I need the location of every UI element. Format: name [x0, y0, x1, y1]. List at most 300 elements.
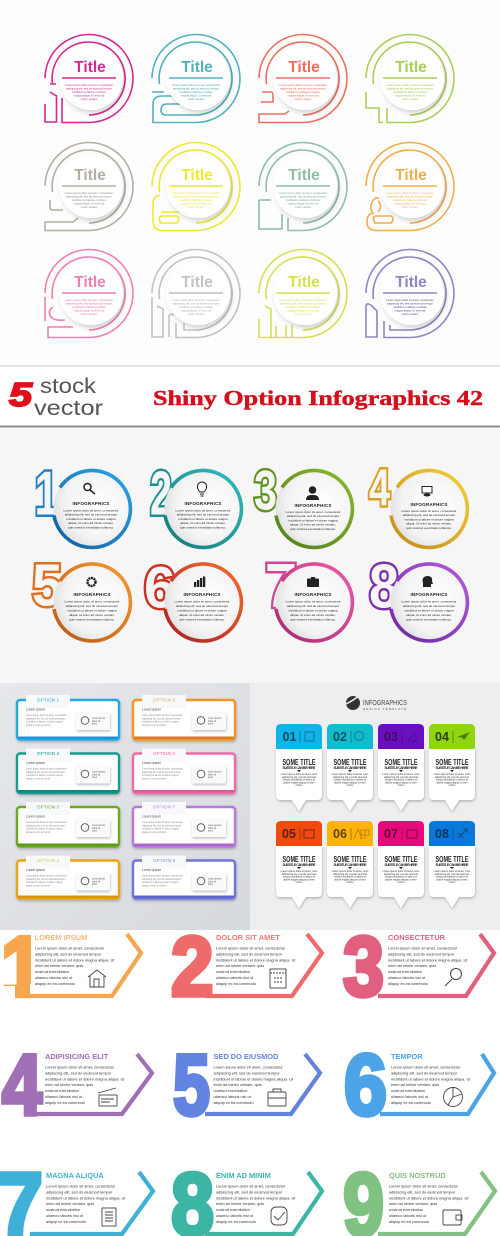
- option 5: incididunt ut labore et dolore magna: [142, 721, 179, 724]
- tile: lime yellow 11: minim veniam: [295, 312, 312, 316]
- tile: sea green 7: incididunt ut labore et dolore: [286, 198, 320, 202]
- step 8: incididunt ut labore et dolore magna aliqua. Ut: [216, 1195, 296, 1200]
- option 8: Lorem ipsum: [208, 878, 221, 880]
- tile: purple 12: Lorem ipsum dolor sit amet, consectetur: [386, 298, 434, 302]
- pin card 07: dolore magna aliqua ut enim: [385, 878, 417, 881]
- step 7: aliquip ex ea commodo: [46, 1219, 86, 1224]
- pin card 07: SUBTITLE CAN BE HERE: [384, 863, 418, 867]
- tile: grey 10: minim veniam: [188, 312, 205, 316]
- pin card 01: minim: [296, 784, 302, 787]
- tile: purple 12: [366, 250, 454, 338]
- pin card 07: 07: [384, 827, 398, 841]
- numbered circle 8: 8: [369, 552, 399, 622]
- numbered circle 6: INFOGRAPHICS: [184, 592, 220, 597]
- pin card 02: SUBTITLE CAN BE HERE: [334, 766, 367, 770]
- step 8: ENIM AD MINIM: [216, 1171, 271, 1180]
- tile: grey 10: Title: [181, 274, 213, 291]
- tile: taupe 5: magna aliqua. Ut enim ad: [74, 202, 105, 206]
- step 7: [0, 1154, 153, 1236]
- numbered circle 1: 1: [34, 460, 58, 528]
- tile: pink 9: Lorem ipsum dolor sit amet, consectetur: [65, 298, 113, 302]
- step 8: [171, 1154, 322, 1236]
- pin card 04: SOME TITLE: [436, 758, 469, 767]
- step 1: 1: [1, 920, 43, 1014]
- pin card 04: 04: [435, 730, 449, 744]
- banner: stock: [40, 375, 97, 398]
- step 4: adipiscing elit, sed do eiusmod tempor: [45, 1070, 112, 1075]
- tile: purple 12: Title: [395, 274, 427, 291]
- pin card 03: 03: [384, 730, 398, 744]
- tile: sea green 7: [259, 142, 347, 230]
- step 5: incididunt ut labore et dolore magna aliqua. Ut: [214, 1076, 294, 1081]
- step 7: enim ad minim veniam, quis: [46, 1201, 94, 1206]
- option 6: adipiscing elit, sed do eiusmod tempor: [142, 771, 181, 774]
- step 3: enim ad minim veniam, quis: [388, 963, 436, 968]
- numbered circle 5: Lorem ipsum dolor sit amet, consectetur: [64, 600, 120, 604]
- option 7: amet: [208, 830, 213, 833]
- pin card 02: tempor incididunt ut labore et: [334, 779, 366, 782]
- option 5: dolor sit: [208, 720, 216, 723]
- numbered circle 8: incididunt ut labore et dolore magna: [404, 608, 454, 612]
- pin card 05: 05: [282, 827, 296, 841]
- tile: lime green 4: adipiscing elit, sed do eiusmod tempor: [387, 86, 433, 90]
- pin card 02: SOME TITLE: [334, 758, 367, 767]
- numbered circle 7: 7: [265, 552, 297, 621]
- step 3: Lorem ipsum dolor sit amet, consectetur: [388, 946, 458, 950]
- step 9: incididunt ut labore et dolore magna aliqua. Ut: [389, 1195, 469, 1200]
- section background: arrow steps: [0, 930, 500, 1236]
- numbered circle 8: adipiscing elit, sed do eiusmod tempor: [403, 604, 455, 608]
- numbered circle 6: 6: [144, 556, 176, 620]
- option 8: OPTION 8: [153, 858, 176, 864]
- step 5: ullamco laboris nisi ut: [214, 1094, 252, 1099]
- numbered circle 5: aliqua. Ut enim ad minim veniam,: [69, 613, 115, 617]
- numbered circle 6: incididunt ut labore et dolore magna: [177, 608, 227, 612]
- step 3: [343, 920, 494, 1014]
- numbered circle 3: adipiscing elit, sed do eiusmod tempor: [287, 514, 339, 518]
- step 5: SED DO EIUSMOD: [214, 1052, 279, 1061]
- step 5: 5: [173, 1038, 210, 1134]
- tile: taupe 5: minim veniam: [81, 205, 98, 209]
- option 3: dolor sit: [92, 827, 100, 830]
- tile: orange 8: Title: [395, 167, 427, 184]
- pin card 05: SOME TITLE: [282, 855, 316, 864]
- step 6: Lorem ipsum dolor sit amet, consectetur: [391, 1064, 461, 1070]
- numbered circle 3: [254, 458, 352, 547]
- numbered circle 6: aliqua. Ut enim ad minim veniam,: [179, 613, 225, 617]
- tile: lime yellow 11: Lorem ipsum dolor sit amet, consectetur: [279, 298, 327, 302]
- step 7: MAGNA ALIQUA: [46, 1171, 104, 1180]
- pin card 08: [429, 821, 475, 908]
- option 4: dolor sit: [92, 880, 100, 883]
- numbered circle 1: Lorem ipsum dolor sit amet, consectetur: [63, 508, 119, 512]
- tile: taupe 5: Title: [74, 167, 106, 184]
- numbered circle 1: adipiscing elit, sed do eiusmod tempor: [65, 513, 117, 517]
- numbered circle 2: [150, 460, 242, 547]
- numbered circle 1: aliqua. Ut enim ad minim veniam,: [68, 521, 114, 525]
- tile: orange 8: adipiscing elit, sed do eiusmod tempor: [387, 194, 433, 198]
- option 2: aliqua ut enim ad minim: [26, 777, 50, 780]
- option 5: [133, 695, 235, 740]
- tile: yellow 6: Title: [181, 167, 213, 184]
- icon: light bulb: [197, 482, 207, 496]
- option 5: Lorem ipsum: [142, 708, 161, 712]
- step 8: Lorem ipsum dolor sit amet, consectetur: [216, 1184, 286, 1188]
- numbered circle 7: aliqua. Ut enim ad minim veniam,: [290, 613, 336, 617]
- icon: wallet: [443, 1210, 462, 1225]
- option 6: amet: [208, 776, 213, 779]
- step 6: TEMPOR: [391, 1052, 423, 1061]
- pin card 06: SUBTITLE CAN BE HERE: [334, 863, 367, 867]
- step 5: aliquip ex ea commodo: [214, 1100, 254, 1105]
- pin card 05: minim: [296, 881, 302, 884]
- option 1: amet: [92, 723, 97, 726]
- tile: orange 8: minim veniam: [402, 205, 419, 209]
- step 3: 3: [343, 920, 384, 1014]
- numbered circle 5: adipiscing elit, sed do eiusmod tempor: [66, 604, 118, 608]
- step 3: aliquip ex ea commodo: [388, 981, 428, 986]
- banner: vector: [34, 397, 103, 420]
- pin card 01: adipiscing elit, sed do eiusmod: [282, 776, 317, 779]
- step 6: incididunt ut labore et dolore magna aliqua. Ut: [391, 1076, 471, 1081]
- step 4: incididunt ut labore et dolore magna aliqua. Ut: [45, 1076, 125, 1081]
- option 7: Lorem ipsum dolor sit amet, consectetur: [142, 821, 183, 824]
- pin card 06: Lorem ipsum dolor sit amet, cons: [332, 870, 369, 873]
- tile: lime green 4: magna aliqua. Ut enim ad: [395, 94, 426, 98]
- numbered circle 7: INFOGRAPHICS: [294, 592, 332, 597]
- pin card 04: dolore magna aliqua ut enim: [436, 781, 468, 784]
- numbered circle 7: incididunt ut labore et dolore magna: [288, 608, 338, 612]
- numbered circle 4: Lorem ipsum dolor sit amet, consectetur: [401, 509, 457, 513]
- pin card 01: SUBTITLE CAN BE HERE: [282, 766, 316, 770]
- step 6: aliquip ex ea commodo: [391, 1100, 431, 1105]
- pin card 07: adipiscing elit, sed do eiusmod: [384, 873, 419, 876]
- step 7: adipiscing elit, sed do eiusmod tempor: [46, 1189, 113, 1194]
- option 4: Lorem ipsum: [26, 868, 45, 872]
- option 7: Lorem ipsum: [142, 814, 161, 818]
- tile: grey 10: adipiscing elit, sed do eiusmod tempor: [173, 302, 219, 306]
- numbered circle 2: INFOGRAPHICS: [184, 501, 222, 506]
- option 7: OPTION 7: [153, 804, 176, 810]
- numbered circle 6: quis nostrud exercitation ullamco.: [179, 618, 225, 622]
- icon: head: [422, 576, 433, 587]
- tile: pink 9: minim veniam: [81, 312, 98, 316]
- option 3: [17, 802, 119, 846]
- pin card 06: adipiscing elit, sed do eiusmod: [333, 873, 368, 876]
- step 2: nostrud exercitation: [216, 969, 250, 974]
- step 9: nostrud exercitation: [389, 1207, 423, 1212]
- tile: magenta 1: Title: [74, 59, 106, 76]
- pin card 01: [276, 724, 322, 811]
- step 6: ullamco laboris nisi ut: [391, 1094, 429, 1099]
- step 9: aliquip ex ea commodo: [389, 1219, 429, 1224]
- option 5: aliqua ut enim ad minim: [142, 724, 166, 727]
- tile: teal 2: incididunt ut labore et dolore: [179, 90, 213, 94]
- option 3: incididunt ut labore et dolore magna: [26, 828, 63, 831]
- tile: purple 12: magna aliqua. Ut enim ad: [395, 308, 426, 312]
- tile: yellow 6: incididunt ut labore et dolore: [179, 198, 213, 202]
- pin card 03: Lorem ipsum dolor sit amet, cons: [383, 773, 420, 776]
- tile: purple 12: incididunt ut labore et dolore: [393, 305, 427, 309]
- tile: taupe 5: incididunt ut labore et dolore: [72, 198, 106, 202]
- tile: pink 9: Title: [74, 274, 106, 291]
- pin card 05: Lorem ipsum dolor sit amet, cons: [281, 870, 318, 873]
- tile: grey 10: Lorem ipsum dolor sit amet, consectetur: [172, 298, 220, 302]
- option 6: Lorem ipsum: [142, 761, 161, 765]
- step 3: ullamco laboris nisi ut: [388, 975, 426, 980]
- tile: lime yellow 11: incididunt ut labore et dolore: [286, 305, 320, 309]
- tile: taupe 5: [45, 142, 133, 230]
- option 7: aliqua ut enim ad minim: [142, 831, 166, 834]
- tile: teal 2: Title: [181, 59, 213, 76]
- option 4: adipiscing elit, sed do eiusmod tempor: [26, 878, 65, 881]
- logo: DESIGN TEMPLATE: [363, 707, 406, 711]
- tile: taupe 5: Lorem ipsum dolor sit amet, consectetur: [65, 191, 113, 195]
- numbered circle 5: [32, 552, 130, 641]
- pin card 05: [276, 821, 322, 908]
- numbered circle 3: incididunt ut labore et dolore magna: [288, 518, 338, 522]
- option 3: aliqua ut enim ad minim: [26, 831, 50, 834]
- option 6: [133, 748, 235, 793]
- tile: teal 2: [152, 35, 240, 123]
- numbered circle 7: quis nostrud exercitation ullamco.: [290, 618, 336, 622]
- banner: 5: [9, 376, 33, 413]
- option 8: aliqua ut enim ad minim: [142, 884, 166, 887]
- numbered circle 8: quis nostrud exercitation ullamco.: [406, 618, 452, 622]
- step 1: nostrud exercitation: [35, 969, 69, 974]
- numbered circle 1: [34, 460, 130, 547]
- option 2: adipiscing elit, sed do eiusmod tempor: [26, 771, 65, 774]
- pin card 03: tempor incididunt ut labore et: [385, 779, 417, 782]
- step 2: aliquip ex ea commodo: [216, 981, 256, 986]
- tile: sea green 7: minim veniam: [295, 205, 312, 209]
- option 7: incididunt ut labore et dolore magna: [142, 828, 179, 831]
- numbered circle 2: quis nostrud exercitation ullamco.: [180, 526, 226, 530]
- pin card 08: dolore magna aliqua ut enim: [436, 878, 468, 881]
- pin card 08: adipiscing elit, sed do eiusmod: [435, 873, 470, 876]
- tile: yellow 6: [152, 142, 240, 230]
- numbered circle 8: INFOGRAPHICS: [410, 592, 448, 597]
- pin card 04: adipiscing elit, sed do eiusmod: [435, 776, 470, 779]
- step 1: adipiscing elit, sed do eiusmod tempor: [35, 951, 102, 956]
- tile: grey 10: [152, 250, 240, 338]
- step 1: LOREM IPSUM: [34, 933, 87, 942]
- option 8: incididunt ut labore et dolore magna: [142, 881, 179, 884]
- option 6: Lorem ipsum dolor sit amet, consectetur: [142, 768, 183, 770]
- pin card 02: dolore magna aliqua ut enim: [334, 781, 366, 784]
- pin card 04: Lorem ipsum dolor sit amet, cons: [434, 773, 471, 776]
- tile: sea green 7: adipiscing elit, sed do eiusmod tempor: [280, 194, 326, 198]
- option 7: [133, 802, 235, 846]
- tile: yellow 6: adipiscing elit, sed do eiusmod tempor: [173, 194, 219, 198]
- numbered circle 5: quis nostrud exercitation ullamco.: [69, 618, 115, 622]
- step 9: enim ad minim veniam, quis: [389, 1201, 437, 1206]
- option 2: [17, 748, 119, 793]
- step 3: adipiscing elit, sed do eiusmod tempor: [388, 951, 455, 956]
- step 2: incididunt ut labore et dolore magna aliqua. Ut: [216, 957, 296, 962]
- step 6: adipiscing elit, sed do eiusmod tempor: [391, 1070, 458, 1075]
- step 3: CONSECTETUR: [388, 933, 446, 942]
- numbered circle 8: [369, 552, 468, 641]
- pin card 04: tempor incididunt ut labore et: [436, 779, 468, 782]
- step 1: aliquip ex ea commodo: [35, 981, 75, 986]
- tile: yellow 6: minim veniam: [188, 205, 205, 209]
- step 1: ullamco laboris nisi ut: [35, 975, 73, 980]
- step 3: nostrud exercitation: [388, 969, 422, 974]
- option 8: dolor sit: [208, 880, 216, 883]
- numbered circle 1: incididunt ut labore et dolore magna: [66, 517, 116, 521]
- numbered circle 2: Lorem ipsum dolor sit amet, consectetur: [175, 508, 231, 512]
- step 7: incididunt ut labore et dolore magna aliqua. Ut: [46, 1195, 126, 1200]
- step 3: incididunt ut labore et dolore magna aliqua. Ut: [388, 957, 468, 962]
- numbered circle 4: adipiscing elit, sed do eiusmod tempor: [403, 513, 455, 517]
- step 1: incididunt ut labore et dolore magna aliqua. Ut: [35, 957, 115, 962]
- pin card 07: SOME TITLE: [384, 855, 418, 864]
- option 1: aliqua ut enim ad minim: [26, 724, 50, 727]
- option 6: dolor sit: [208, 773, 216, 776]
- step 7: Lorem ipsum dolor sit amet, consectetur: [46, 1184, 116, 1188]
- pin card 07: tempor incididunt ut labore et: [385, 876, 417, 879]
- pin card 06: [327, 821, 373, 908]
- step 8: enim ad minim veniam, quis: [216, 1201, 264, 1206]
- option 8: Lorem ipsum: [142, 868, 161, 872]
- numbered circle 5: incididunt ut labore et dolore magna: [67, 608, 117, 612]
- option 2: amet: [92, 776, 97, 779]
- pin card 02: adipiscing elit, sed do eiusmod: [333, 776, 368, 779]
- option 4: OPTION 4: [37, 858, 60, 864]
- step 4: [2, 1038, 152, 1134]
- icon: calendar: [270, 969, 286, 988]
- step 5: [173, 1038, 320, 1134]
- option 1: adipiscing elit, sed do eiusmod tempor: [26, 717, 65, 720]
- tile: lime green 4: [366, 35, 454, 123]
- step 2: ullamco laboris nisi ut: [216, 975, 254, 980]
- tile: coral 3: minim veniam: [295, 97, 312, 101]
- step 8: ullamco laboris nisi ut: [216, 1213, 254, 1218]
- pin card 03: dolore magna aliqua ut enim: [385, 781, 417, 784]
- option 6: OPTION 6: [153, 751, 176, 757]
- tile: magenta 1: minim veniam: [81, 97, 98, 101]
- icon: magnifier: [84, 484, 95, 494]
- numbered circle 5: 5: [32, 552, 62, 618]
- step 2: Lorem ipsum dolor sit amet, consectetur: [216, 946, 286, 950]
- tile: coral 3: magna aliqua. Ut enim ad: [288, 94, 319, 98]
- option 4: amet: [92, 883, 97, 886]
- step 6: 6: [344, 1038, 387, 1134]
- icon: gear: [88, 578, 96, 586]
- option 3: Lorem ipsum: [92, 824, 105, 827]
- pin card 03: adipiscing elit, sed do eiusmod: [384, 776, 419, 779]
- tile: coral 3: [259, 35, 347, 123]
- numbered circle 6: Lorem ipsum dolor sit amet, consectetur: [174, 600, 230, 604]
- tile: lime yellow 11: [259, 250, 347, 338]
- logo: INFOGRAPHICS: [363, 700, 407, 707]
- section background: numbered circles: [0, 428, 500, 683]
- step 8: nostrud exercitation: [216, 1207, 250, 1212]
- step 1: Lorem ipsum dolor sit amet, consectetur: [35, 946, 105, 950]
- option 7: Lorem ipsum: [208, 824, 221, 827]
- pin card 01: tempor incididunt ut labore et: [283, 779, 315, 782]
- tile: lime yellow 11: adipiscing elit, sed do eiusmod tempor: [280, 302, 326, 306]
- option 8: Lorem ipsum dolor sit amet, consectetur: [142, 874, 183, 878]
- tile: lime yellow 11: magna aliqua. Ut enim ad: [288, 308, 319, 312]
- pin card 08: Lorem ipsum dolor sit amet, cons: [434, 870, 471, 873]
- icon: briefcase: [268, 1089, 286, 1106]
- numbered circle 2: 2: [150, 460, 172, 528]
- pin card 01: Lorem ipsum dolor sit amet, cons: [281, 773, 318, 776]
- step 1: enim ad minim veniam, quis: [35, 963, 83, 968]
- pin card 08: minim: [449, 881, 455, 884]
- option 4: Lorem ipsum dolor sit amet, consectetur: [26, 874, 67, 878]
- panel: pin cards: [250, 683, 500, 930]
- pin card 08: SUBTITLE CAN BE HERE: [436, 863, 469, 867]
- icon: clipboard: [102, 1208, 116, 1226]
- option 1: dolor sit: [92, 720, 100, 723]
- option 3: Lorem ipsum dolor sit amet, consectetur: [26, 821, 67, 824]
- option 4: aliqua ut enim ad minim: [26, 884, 50, 887]
- numbered circle 1: INFOGRAPHICS: [72, 501, 110, 506]
- option 7: dolor sit: [208, 827, 216, 830]
- option 2: Lorem ipsum: [26, 761, 45, 765]
- pin card 03: minim: [398, 784, 404, 787]
- option 1: Lorem ipsum dolor sit amet, consectetur: [26, 714, 67, 717]
- option 5: amet: [208, 723, 213, 726]
- option 8: [133, 856, 235, 898]
- pin card 01: SOME TITLE: [282, 758, 316, 767]
- icon: briefcase: [307, 577, 319, 587]
- icon: pie chart: [444, 1088, 462, 1106]
- tile: grey 10: incididunt ut labore et dolore: [179, 305, 213, 309]
- numbered circle 1: quis nostrud exercitation ullamco.: [68, 526, 114, 530]
- icon: bars: [194, 576, 205, 587]
- tile: lime green 4: Lorem ipsum dolor sit amet, consectetur: [386, 83, 434, 87]
- option 8: adipiscing elit, sed do eiusmod tempor: [142, 878, 181, 881]
- step 4: aliquip ex ea commodo: [45, 1100, 85, 1105]
- option 1: [17, 695, 119, 740]
- step 7: ullamco laboris nisi ut: [46, 1213, 84, 1218]
- pin card 04: minim: [449, 784, 455, 787]
- logo: [346, 695, 407, 711]
- step 2: enim ad minim veniam, quis: [216, 963, 264, 968]
- tile: magenta 1: Lorem ipsum dolor sit amet, consectetur: [65, 83, 113, 87]
- tile: pink 9: [45, 250, 133, 338]
- numbered circle 3: 3: [254, 458, 277, 522]
- tile: pink 9: adipiscing elit, sed do eiusmod tempor: [66, 302, 112, 306]
- tile: teal 2: magna aliqua. Ut enim ad: [181, 94, 212, 98]
- tile: magenta 1: adipiscing elit, sed do eiusmod tempor: [66, 86, 112, 90]
- tile: sea green 7: magna aliqua. Ut enim ad: [288, 202, 319, 206]
- pin card 06: minim: [347, 881, 353, 884]
- step 2: adipiscing elit, sed do eiusmod tempor: [216, 951, 283, 956]
- pin card 05: SUBTITLE CAN BE HERE: [282, 863, 316, 867]
- numbered circle 4: quis nostrud exercitation ullamco.: [406, 526, 452, 530]
- tile: coral 3: adipiscing elit, sed do eiusmod tempor: [280, 86, 326, 90]
- numbered circle 3: aliqua. Ut enim ad minim veniam,: [290, 523, 336, 527]
- option 3: adipiscing elit, sed do eiusmod tempor: [26, 824, 65, 827]
- tile: yellow 6: Lorem ipsum dolor sit amet, consectetur: [172, 191, 220, 195]
- numbered circle 4: INFOGRAPHICS: [410, 502, 448, 507]
- tile: sea green 7: Title: [288, 167, 320, 184]
- tile: coral 3: Title: [288, 59, 320, 76]
- icon: monitor: [422, 486, 432, 496]
- tile: purple 12: minim veniam: [402, 312, 419, 316]
- step 9: adipiscing elit, sed do eiusmod tempor: [389, 1189, 456, 1194]
- step 4: 4: [2, 1038, 42, 1134]
- numbered circle 4: [369, 460, 468, 547]
- numbered circle 4: aliqua. Ut enim ad minim veniam,: [406, 522, 452, 526]
- numbered circle 2: adipiscing elit, sed do eiusmod tempor: [177, 513, 229, 517]
- numbered circle 4: incididunt ut labore et dolore magna: [404, 518, 454, 522]
